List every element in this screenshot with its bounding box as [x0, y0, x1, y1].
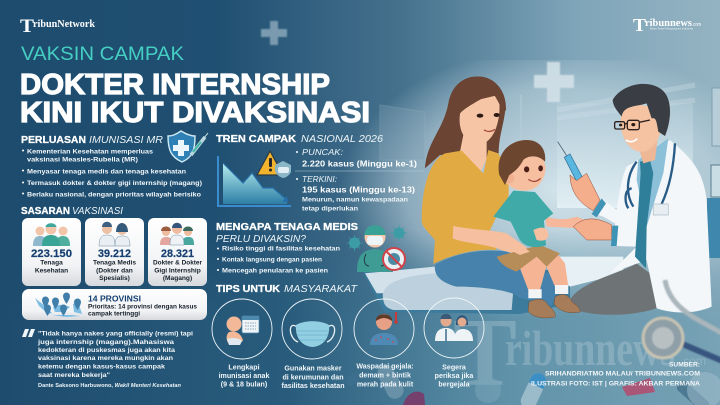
tip: waspadai gejala: merah pada kulit	[357, 380, 414, 388]
decorative medical cross left	[261, 21, 287, 45]
quote text: saat mereka bekerja"	[38, 372, 110, 379]
quote text: kedokteran di puskesmas juga akan kita	[38, 347, 175, 354]
heading: IMUNISASI MR	[89, 135, 163, 146]
title: KINI IKUT DIVAKSINASI	[20, 97, 370, 129]
tip: waspadai gejala	[354, 299, 414, 388]
tip: masker	[281, 299, 345, 390]
icon: map of Indonesia with pins	[35, 293, 82, 317]
examination bed	[365, 257, 623, 310]
card: dokter internship	[148, 218, 207, 286]
card: 14 provinsi: campak tertinggi	[88, 312, 140, 318]
tip: waspadai gejala: demam + bintik	[359, 372, 411, 380]
card: tenaga medis: (Dokter dan	[96, 268, 133, 274]
logo Tribunnews: ribunnews	[645, 18, 692, 29]
tip: segera periksa: bergejala	[438, 380, 470, 388]
stethoscope foreground	[643, 280, 720, 362]
heading: SASARAN	[21, 206, 70, 217]
card: tenaga kesehatan: 223.150	[31, 248, 72, 260]
tip: imunisasi anak: (9 & 18 bulan)	[221, 380, 268, 388]
bullet list: Termasuk dokter & dokter gigi internship (magang)	[27, 180, 202, 187]
card: tenaga kesehatan	[22, 218, 81, 286]
illustration: mother, child and doctor	[365, 76, 712, 315]
card: tenaga kesehatan: Tenaga	[40, 260, 63, 266]
tip: segera periksa: Segera	[442, 364, 466, 372]
card: tenaga medis: Tenaga Medis	[93, 260, 136, 266]
heading: TIPS UNTUK	[216, 284, 281, 295]
card: dokter internship: Dokter & Dokter	[153, 260, 202, 266]
stat: terkini: TERKINI:	[302, 175, 337, 184]
title: DOKTER INTERNSHIP	[20, 69, 330, 101]
quote text: "Tidak hanya nakes yang officially (resmi) tapi	[38, 330, 193, 338]
credits: SUMBER:	[669, 362, 700, 368]
heading	[216, 134, 383, 145]
quote	[22, 329, 193, 389]
heading: TREN CAMPAK	[216, 134, 297, 145]
icon: quote mark	[22, 329, 35, 337]
stat: puncak: PUNCAK:	[302, 148, 343, 157]
heading	[216, 284, 358, 295]
credits: SRIHANDRIATMO MALAU/ TRIBUNNEWS.COM	[545, 372, 700, 378]
bullet list	[217, 246, 340, 274]
quote text: vaksinasi karena mereka mungkin akan	[38, 355, 173, 362]
watermark Tribunnews	[453, 299, 706, 405]
bullet list	[22, 148, 202, 198]
tip: imunisasi anak	[212, 299, 272, 388]
heading	[21, 135, 163, 146]
heading	[21, 206, 123, 217]
logo TribunNetwork	[20, 16, 96, 37]
bullet list: vaksinasi Measles-Rubella (MR)	[27, 156, 138, 164]
heading: PERLUASAN	[21, 135, 86, 146]
stat: terkini: 195 kasus (Minggu ke-13)	[302, 184, 415, 194]
credits: ILUSTRASI FOTO: IST | GRAFIS: AKBAR PERMANA	[531, 382, 701, 388]
decorative medical cross right	[534, 62, 574, 102]
bullet list: Berlaku nasional, dengan prioritas wilayah berisiko	[27, 192, 201, 198]
tip: masker: Gunakan masker	[284, 364, 342, 372]
card: dokter internship: (Magang)	[163, 275, 192, 282]
icon: medic with viruses	[346, 225, 407, 272]
bullet list: Menyasar tenaga medis dan tenaga kesehatan	[27, 168, 186, 176]
panel: perluasan imunisasi MR	[21, 131, 208, 198]
heading: MENGAPA TENAGA MEDIS	[216, 222, 358, 233]
stat: terkini	[296, 175, 415, 212]
line chart	[218, 156, 291, 206]
mother	[422, 76, 557, 308]
bullet list: Mencegah penularan ke pasien	[222, 268, 328, 274]
attribution: Dante Saksono Harbuwono, Wakil Menteri Kesehatan	[38, 383, 181, 389]
tip: imunisasi anak: Lengkapi	[228, 364, 260, 372]
decorative pills	[344, 362, 720, 405]
tip: imunisasi anak: imunisasi anak	[219, 372, 269, 380]
tip: segera periksa: periksa jika	[435, 372, 473, 380]
doctor	[558, 84, 712, 315]
stat: puncak	[296, 148, 417, 168]
panel: tren campak	[216, 134, 424, 212]
card: 14 provinsi	[22, 289, 207, 320]
stat: terkini: Menurun, namun kewaspadaan	[302, 198, 408, 204]
icon: shield and syringe	[168, 131, 208, 162]
child	[493, 140, 593, 298]
quote text: ketemu dengan kasus-kasus campak	[38, 364, 165, 370]
tip: masker: fasilitas kesehatan	[281, 382, 345, 390]
card: tenaga medis	[85, 218, 144, 286]
stat: terkini: tetap diperlukan	[302, 206, 358, 212]
card: dokter internship: Gigi Internship	[154, 268, 201, 274]
heading: NASIONAL 2026	[301, 134, 383, 145]
card: 14 provinsi: Prioritas: 14 provinsi dengan kasus	[88, 304, 198, 310]
card: 14 provinsi: 14 PROVINSI	[88, 294, 141, 304]
card: tenaga kesehatan: Kesehatan	[35, 268, 68, 274]
heading: MASYARAKAT	[284, 284, 358, 295]
icon: feverish person	[370, 312, 398, 345]
card: dokter internship: 28.321	[161, 248, 194, 260]
panel: tips untuk masyarakat	[212, 284, 484, 390]
heading: PERLU DIVAKSIN?	[216, 234, 306, 245]
logo Tribunnews: T	[633, 15, 646, 35]
logo TribunNetwork: T	[20, 16, 34, 37]
bullet list: Risiko tinggi di fasilitas kesehatan	[222, 246, 340, 252]
heading: VAKSINASI	[72, 206, 123, 217]
icon: warning and mask	[257, 151, 291, 178]
logo Tribunnews: Berita Terkini Menginspirasi Indonesia	[650, 26, 694, 30]
kicker: VAKSIN CAMPAK	[21, 43, 184, 65]
tip: segera periksa	[424, 298, 484, 388]
tip: masker: di kerumunan dan	[282, 374, 344, 382]
card: tenaga medis: 39.212	[98, 248, 131, 260]
quote text	[37, 330, 193, 379]
icon: two doctors	[435, 314, 473, 341]
title	[20, 69, 370, 129]
watermark Tribunnews: .com	[680, 354, 706, 368]
child's shoes	[528, 295, 580, 318]
quote text: juga internship (magang).Mahasiswa	[37, 339, 175, 346]
syringe	[558, 142, 593, 197]
card: tenaga medis: Spesialis)	[99, 275, 130, 282]
icon: face mask	[290, 321, 335, 347]
logo TribunNetwork: ribunNetwork	[33, 18, 96, 30]
background	[180, 0, 720, 405]
bench frame under the figures	[362, 270, 570, 314]
panel: mengapa tenaga medis	[216, 222, 407, 274]
credits	[531, 362, 701, 388]
tip: waspadai gejala: Waspadai gejala:	[356, 362, 414, 370]
watermark Tribunnews: T	[453, 299, 517, 405]
stat: puncak: 2.220 kasus (Minggu ke-1)	[302, 158, 417, 168]
icon: baby and calendar	[226, 316, 259, 345]
logo Tribunnews	[633, 15, 701, 35]
bullet list: Kementerian Kesehatan memperluas	[27, 148, 153, 156]
bullet list: Kontak langsung dengan pasien	[222, 256, 322, 264]
panel: sasaran vaksinasi	[21, 206, 207, 320]
logo Tribunnews: .com	[692, 22, 701, 28]
heading	[216, 222, 358, 245]
